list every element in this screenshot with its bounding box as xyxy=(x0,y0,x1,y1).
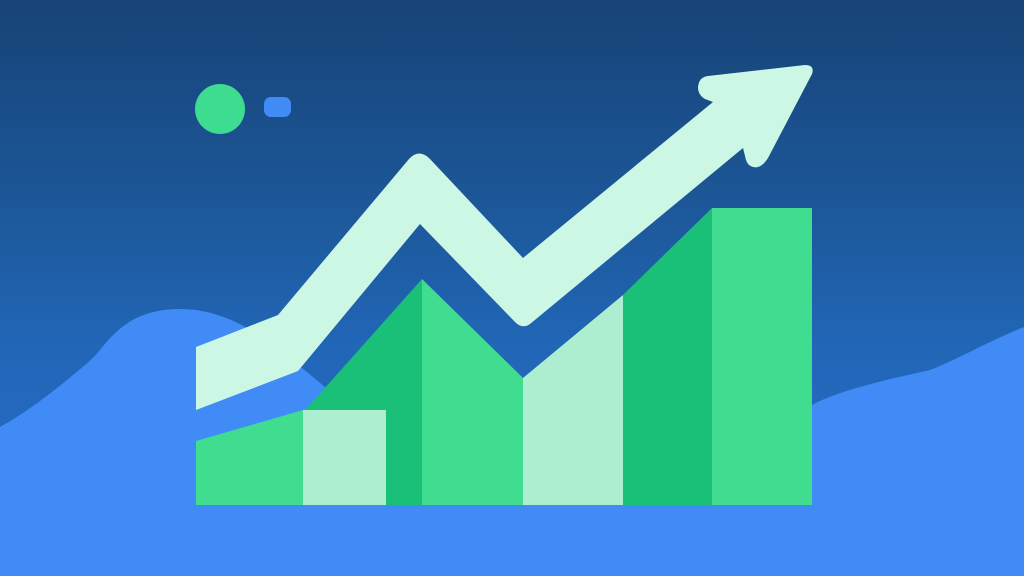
decorative blue pill xyxy=(264,97,291,117)
background hills xyxy=(0,309,1024,576)
decorative green circle xyxy=(195,84,245,134)
bar 6 xyxy=(712,208,812,505)
bar 3 dark facet xyxy=(303,279,422,505)
bar 1 xyxy=(196,410,303,505)
bar 4 xyxy=(523,295,623,505)
bar 5 dark facet xyxy=(623,208,712,505)
rising arrow xyxy=(196,65,813,410)
bar 2 xyxy=(303,410,386,505)
bar chart xyxy=(196,208,812,505)
bar 3 light facet xyxy=(422,279,523,505)
